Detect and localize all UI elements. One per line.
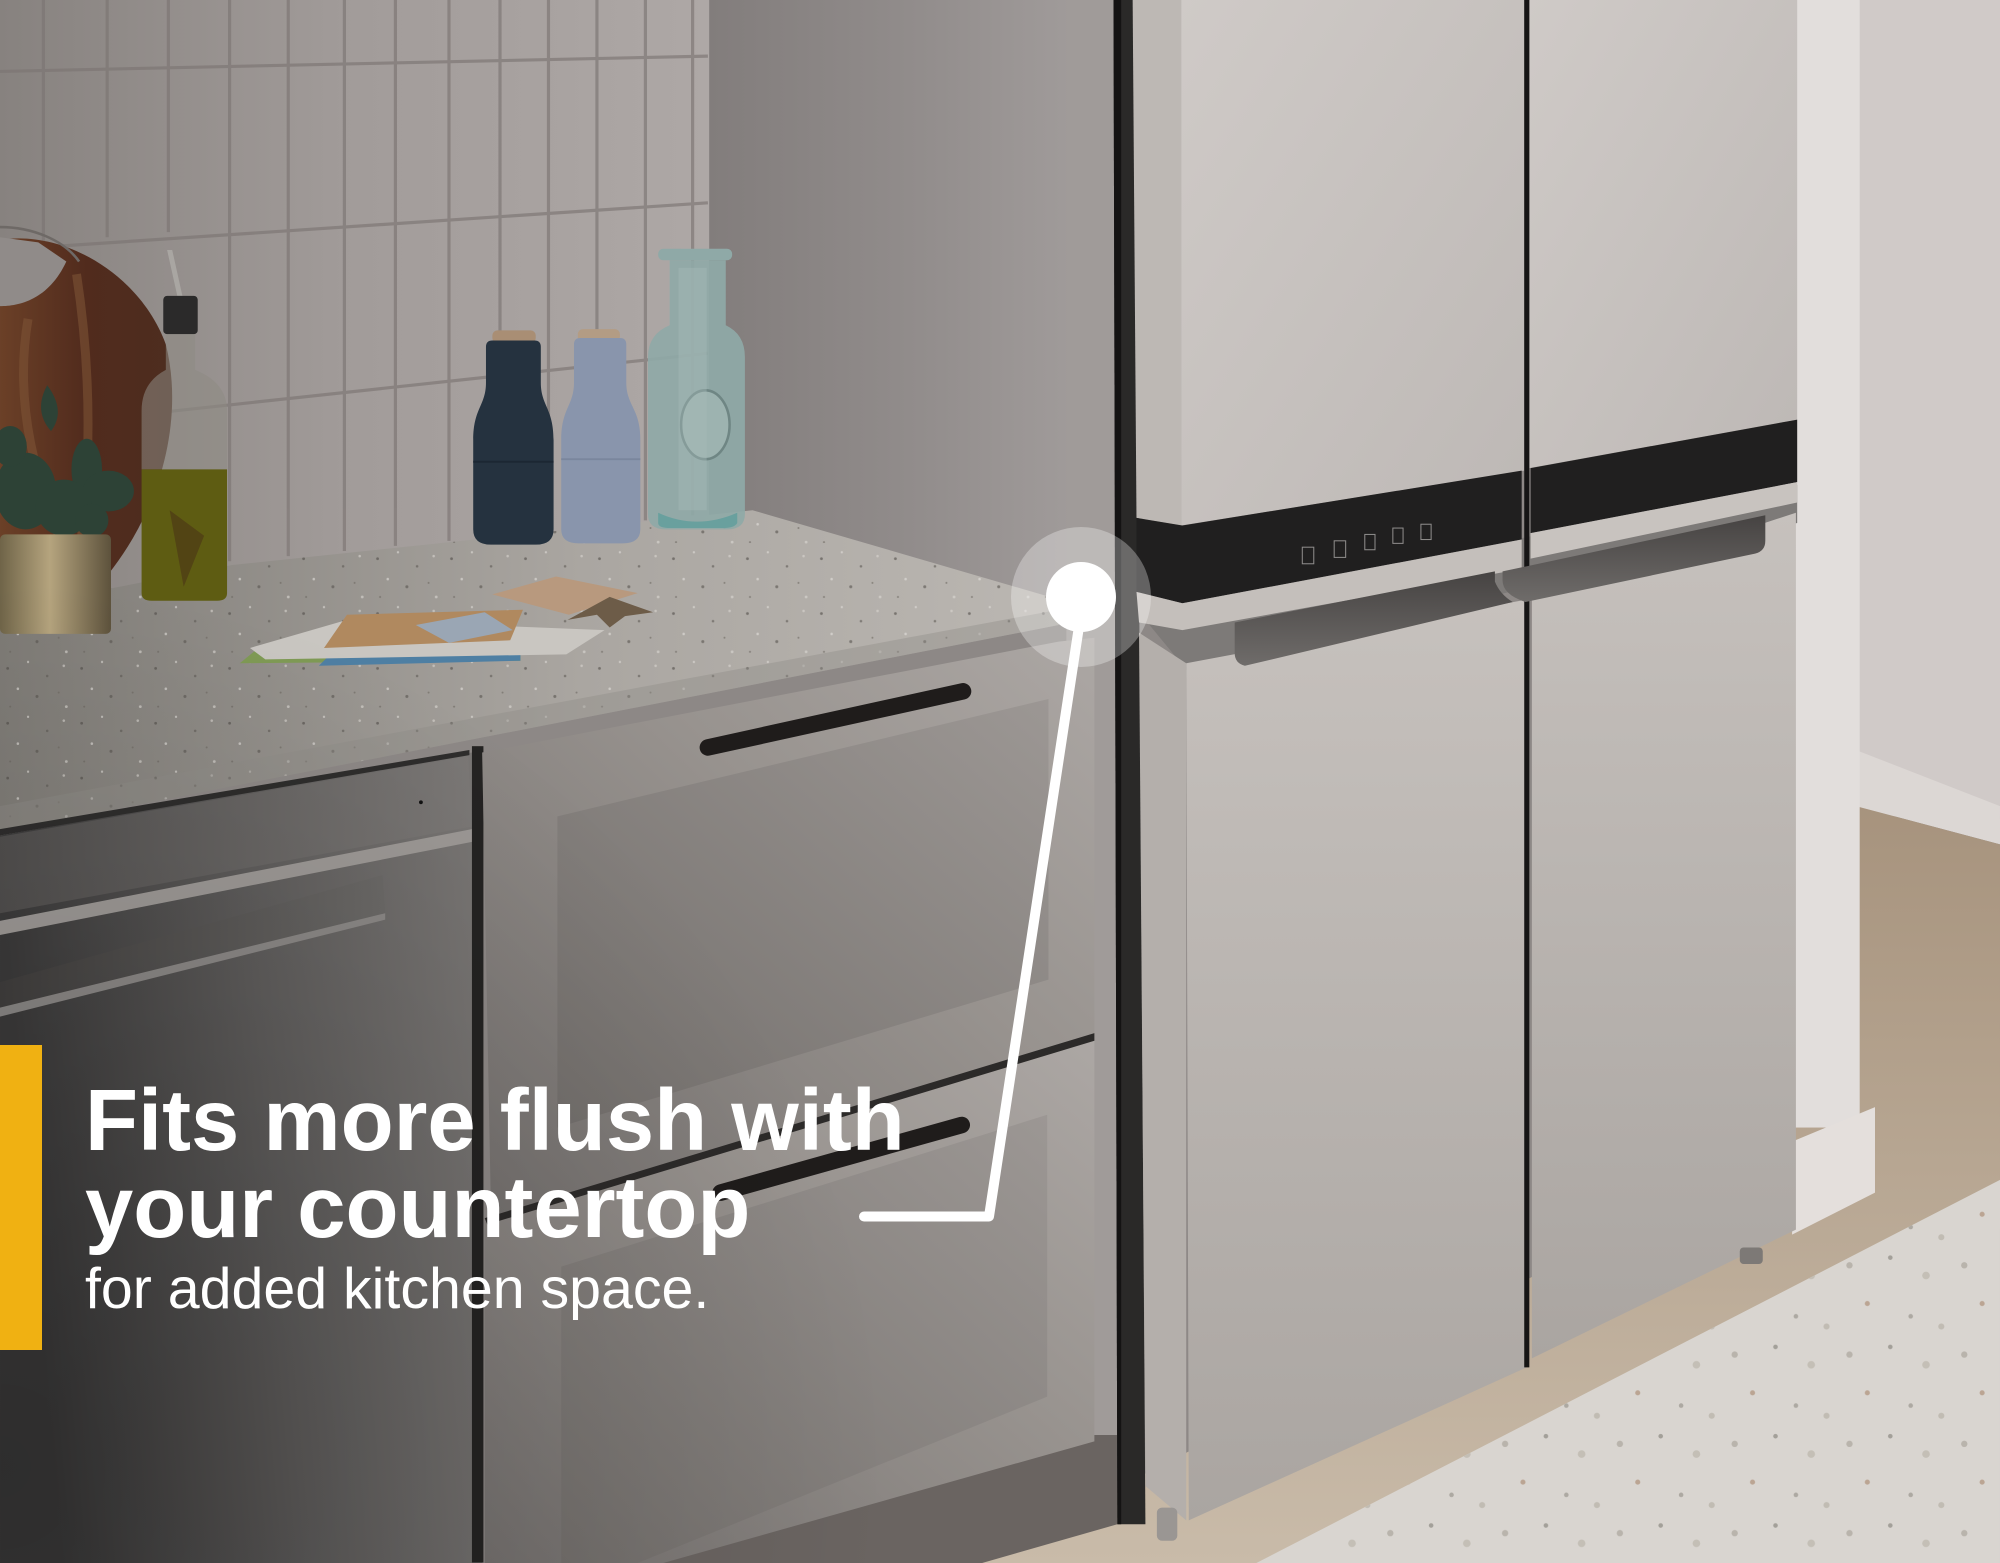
dark pepper grinder (473, 330, 554, 545)
left door handle (1235, 571, 1513, 666)
back wall and column at right (969, 0, 2000, 1563)
heading (85, 1072, 905, 1256)
side cabinet column (1066, 0, 1117, 1563)
heading: your countertop (85, 1159, 750, 1256)
upper left door (1133, 0, 1181, 526)
black control band left (1136, 471, 1522, 603)
right door handle (1503, 515, 1765, 602)
lower right door (1532, 513, 1796, 1358)
gap behind handles (1139, 485, 1797, 670)
cabinet drawers (472, 638, 1117, 1563)
upper drawer panel (557, 699, 1048, 1128)
lower drawer handle (721, 1125, 962, 1193)
leader line arrow (864, 620, 1080, 1216)
dishwasher (0, 750, 482, 1563)
potted plant (0, 385, 134, 634)
tile backsplash (0, 0, 714, 612)
lower drawer panel (561, 1115, 1047, 1563)
dark gradient overlay (0, 574, 1020, 1563)
keys and pouch (492, 577, 653, 628)
heading: Fits more flush with (85, 1072, 905, 1169)
gap beside refrigerator (1114, 0, 1145, 1524)
subheading: for added kitchen space. (85, 1257, 709, 1321)
toe kick (638, 1435, 1117, 1563)
mail pile (240, 610, 605, 666)
center door gap (1525, 0, 1529, 1367)
lower left door (1139, 633, 1186, 1520)
countertop (0, 510, 1059, 832)
niche wall (709, 0, 1073, 612)
glass bottle (648, 249, 745, 529)
refrigerator feet (1157, 1508, 1177, 1541)
black band right (1531, 420, 1797, 533)
light pepper grinder (561, 329, 640, 543)
yellow accent bar (0, 1045, 42, 1350)
control panel icons (1302, 524, 1431, 564)
silver trim (1136, 540, 1522, 630)
callout hotspot marker (1011, 527, 1151, 667)
terrazzo floor rug (1256, 1180, 2000, 1563)
cutting board (0, 227, 172, 574)
refrigerator (1114, 0, 1797, 1541)
olive oil bottle (142, 250, 227, 601)
upper right door (1529, 0, 1797, 468)
upper drawer handle (708, 691, 963, 747)
